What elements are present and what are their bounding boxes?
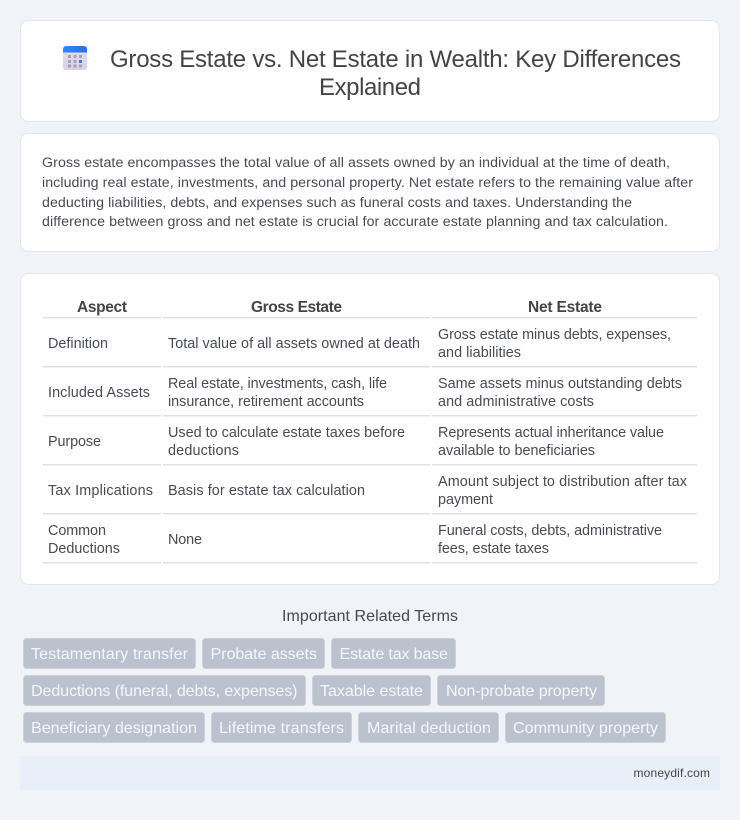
- panel: comparison table: [20, 274, 720, 584]
- tag: lifetime transfers: [212, 712, 352, 742]
- table row: purpose: Purpose: [48, 434, 101, 450]
- tag: probate assets: [202, 638, 324, 668]
- table row: definition: and liabilities: [438, 345, 521, 361]
- tag: community property: [506, 712, 666, 742]
- text block: description: [42, 155, 693, 230]
- tag: non-probate property: [438, 676, 604, 706]
- tag: testamentary transfer: Testamentary transfer: [31, 645, 189, 663]
- table row: tax implications: [48, 474, 688, 508]
- table row: definition: Gross estate minus debts, expenses,: [438, 327, 671, 343]
- tag cloud: related terms: [24, 638, 666, 742]
- table row: tax implications: Tax Implications: [48, 483, 153, 499]
- tag: community property: Community property: [513, 719, 659, 737]
- table header: [77, 299, 602, 316]
- table row: purpose: available to beneficiaries: [438, 443, 595, 459]
- table row: common deductions: Common: [48, 523, 106, 539]
- table row: common deductions: None: [168, 532, 202, 548]
- table row: included assets: Included Assets: [48, 385, 150, 401]
- table row: included assets: and administrative costs: [438, 394, 594, 410]
- panel: description: [20, 134, 720, 252]
- tag: estate tax base: [332, 638, 456, 668]
- table row: included assets: [48, 376, 682, 410]
- table row: tax implications: payment: [438, 492, 493, 508]
- table row: purpose: deductions: [168, 443, 239, 459]
- heading: important related terms: Important Related Terms: [282, 608, 458, 625]
- table row: common deductions: Funeral costs, debts, administrative: [438, 523, 662, 539]
- table header: Gross Estate: [251, 299, 342, 316]
- footer: [20, 756, 720, 790]
- tag: deductions: Deductions (funeral, debts, expenses): [31, 682, 298, 700]
- text block: description: Gross estate encompasses the total value of all assets owned by an individual at the time of death,: [42, 155, 670, 171]
- table row: definition: [48, 327, 671, 361]
- tag: taxable estate: [312, 676, 430, 706]
- table row: common deductions: fees, estate taxes: [438, 541, 549, 557]
- table row: common deductions: Deductions: [48, 541, 120, 557]
- table row: purpose: Represents actual inheritance value: [438, 425, 664, 441]
- table header: Net Estate: [528, 299, 602, 316]
- table row: included assets: Real estate, investments, cash, life: [168, 376, 387, 392]
- text block: description: including real estate, investments, and personal property. Net estate refers to the remaining value after: [42, 175, 693, 191]
- title: Explained: [319, 74, 421, 101]
- tag: testamentary transfer: [24, 638, 196, 668]
- icon: calendar: [63, 46, 87, 70]
- tag: lifetime transfers: Lifetime transfers: [219, 719, 344, 737]
- table row: definition: Definition: [48, 336, 108, 352]
- tag: beneficiary designation: [24, 712, 204, 742]
- table row: tax implications: Amount subject to distribution after tax: [438, 474, 688, 490]
- tag: beneficiary designation: Beneficiary designation: [31, 719, 197, 737]
- table row: included assets: Same assets minus outstanding debts: [438, 376, 682, 392]
- title: [110, 46, 681, 101]
- text block: description: deducting liabilities, debts, and expenses such as funeral costs and taxes. Understanding the: [42, 195, 632, 211]
- table row: purpose: Used to calculate estate taxes before: [168, 425, 405, 441]
- panel: title card: [20, 20, 720, 122]
- title: Gross Estate vs. Net Estate in Wealth: Key Differences: [110, 46, 681, 73]
- tag: non-probate property: Non-probate property: [446, 682, 598, 700]
- text block: description: difference between gross and net estate is crucial for accurate estate planning and tax calculation.: [42, 214, 668, 230]
- tag: marital deduction: Marital deduction: [367, 719, 491, 737]
- tag: probate assets: Probate assets: [210, 645, 317, 663]
- table row: tax implications: Basis for estate tax calculation: [168, 483, 365, 499]
- table row: included assets: insurance, retirement accounts: [168, 394, 364, 410]
- table header: Aspect: [77, 299, 127, 316]
- tag: marital deduction: [358, 712, 498, 742]
- table row: definition: Total value of all assets owned at death: [168, 336, 420, 352]
- tag: deductions: [24, 676, 306, 706]
- tag: taxable estate: Taxable estate: [320, 682, 423, 700]
- tag: estate tax base: Estate tax base: [340, 645, 448, 663]
- table row: purpose: [48, 425, 664, 459]
- footer: moneydif.com: [634, 766, 710, 780]
- table row: common deductions: [48, 523, 662, 557]
